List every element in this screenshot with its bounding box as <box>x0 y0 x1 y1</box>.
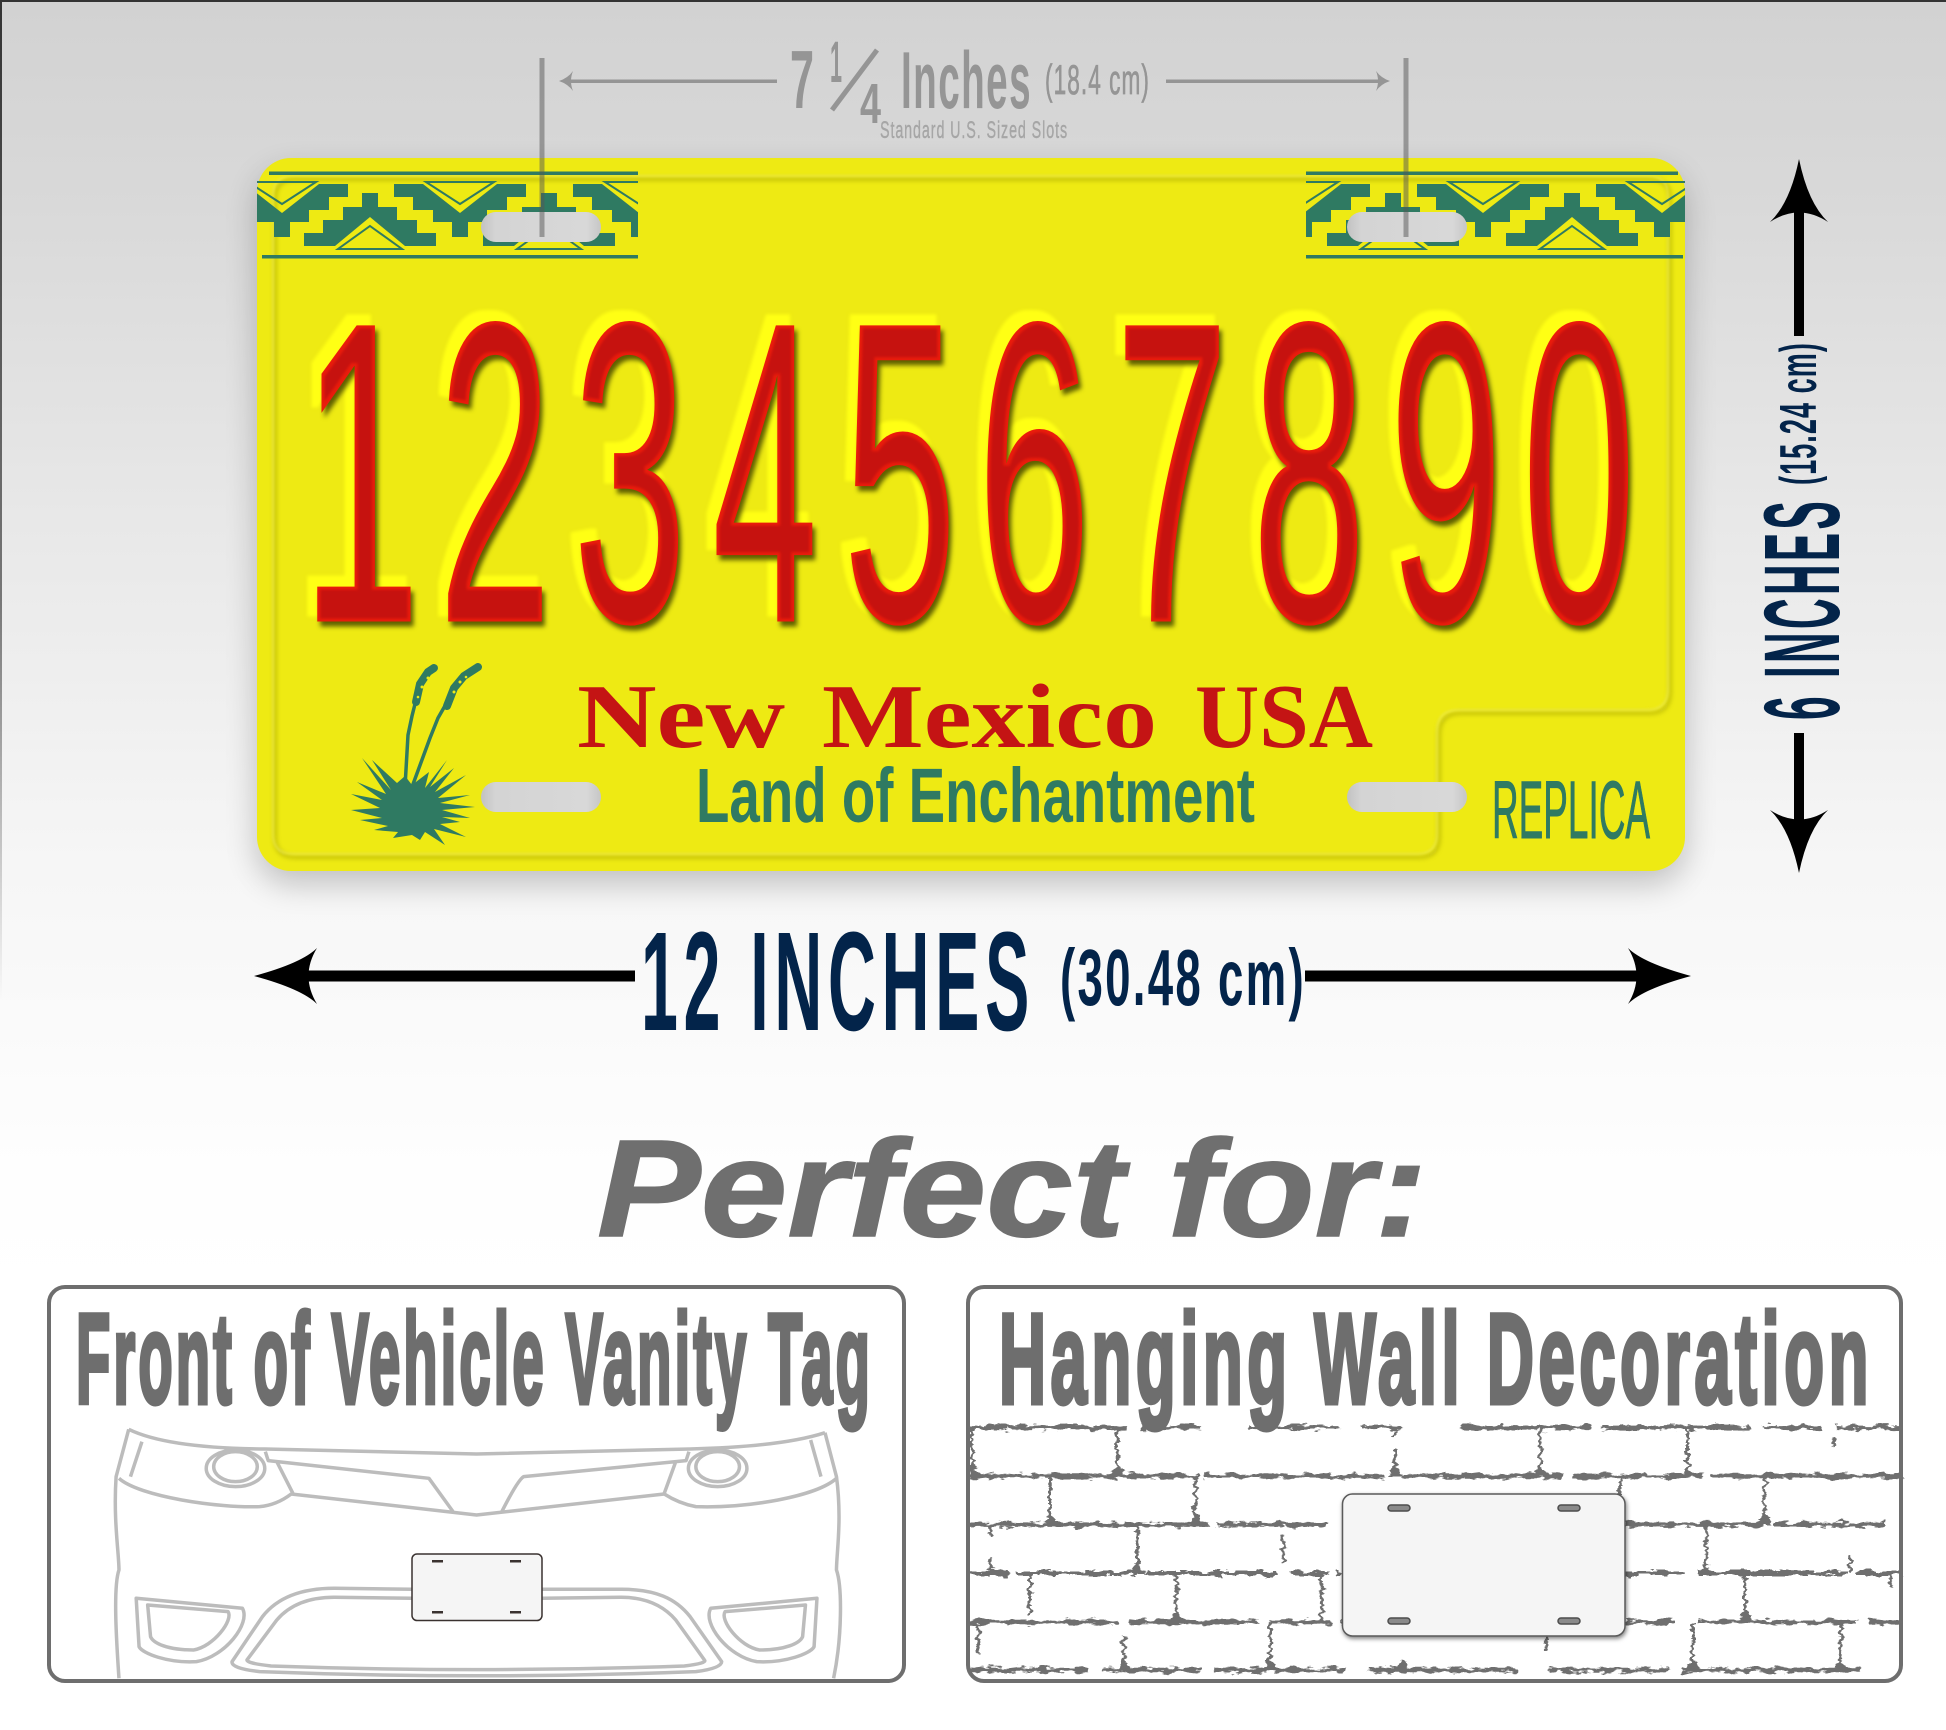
slot spacing label: 7 <box>790 33 814 126</box>
icon: yucca plant <box>351 667 478 845</box>
plate number: 1 <box>302 235 420 711</box>
panel: hanging wall decoration <box>968 1287 1901 1681</box>
height label: 6 INCHES <box>1741 498 1862 720</box>
panel: front of vehicle <box>49 1287 904 1681</box>
plate number: 0 <box>1523 234 1635 711</box>
mini plate on wall <box>1342 1494 1625 1636</box>
plate number: 2 <box>439 234 551 711</box>
plate number: 7 <box>1116 234 1228 711</box>
plate number: 9 <box>1390 234 1502 711</box>
mini plate on car <box>412 1554 542 1620</box>
slot spacing label: 1 <box>830 30 842 95</box>
plate number: 5 <box>844 234 956 711</box>
license plate <box>216 158 1728 884</box>
arrow: slot spacing right <box>1166 71 1390 91</box>
pattern: top right border <box>1306 172 1685 258</box>
slot spacing label <box>790 30 1150 144</box>
brick wall <box>969 1427 1901 1670</box>
mortar lines <box>969 1427 1901 1670</box>
state name: Mexico <box>822 666 1157 767</box>
plate number: 8 <box>1253 234 1365 711</box>
state name: New <box>577 666 785 767</box>
pattern: top left border <box>257 172 638 258</box>
mounting slots <box>481 212 1467 812</box>
height label <box>1741 342 1862 720</box>
arrow: width left <box>254 948 635 1004</box>
plate number: 4 <box>713 234 817 711</box>
width label: 12 INCHES <box>641 902 1035 1060</box>
height dimension <box>1741 159 1862 873</box>
slot spacing label: (18.4 cm) <box>1045 56 1150 103</box>
width label: (30.48 cm) <box>1060 933 1306 1022</box>
arrow: slot spacing left <box>559 71 777 91</box>
arrow: width right <box>1305 948 1691 1004</box>
arrow: height down <box>1770 733 1828 873</box>
plate number: 6 <box>978 234 1090 711</box>
width dimension <box>254 902 1691 1060</box>
text: Front of Vehicle Vanity Tag <box>76 1288 873 1431</box>
embossed plate border <box>273 176 1670 857</box>
slot guide lines <box>540 58 1408 237</box>
slot spacing label: Standard U.S. Sized Slots <box>880 117 1068 144</box>
license plate: REPLICA <box>1492 765 1650 856</box>
slot spacing label: 4 <box>860 72 881 136</box>
slogan: Land of Enchantment <box>696 753 1255 839</box>
mortar joints <box>969 1463 1849 1669</box>
state name <box>577 666 1373 767</box>
vertical mortar <box>972 1427 1891 1669</box>
car outline <box>115 1429 840 1678</box>
plate number: 3 <box>574 234 686 711</box>
slot spacing dimension <box>540 30 1408 237</box>
state name: USA <box>1195 666 1373 767</box>
heading: perfect for: Perfect for: <box>597 1112 1427 1266</box>
slot spacing label: Inches <box>901 36 1032 126</box>
plate number <box>302 234 1635 711</box>
arrow: height up <box>1770 159 1828 336</box>
height label: (15.24 cm) <box>1770 342 1828 485</box>
